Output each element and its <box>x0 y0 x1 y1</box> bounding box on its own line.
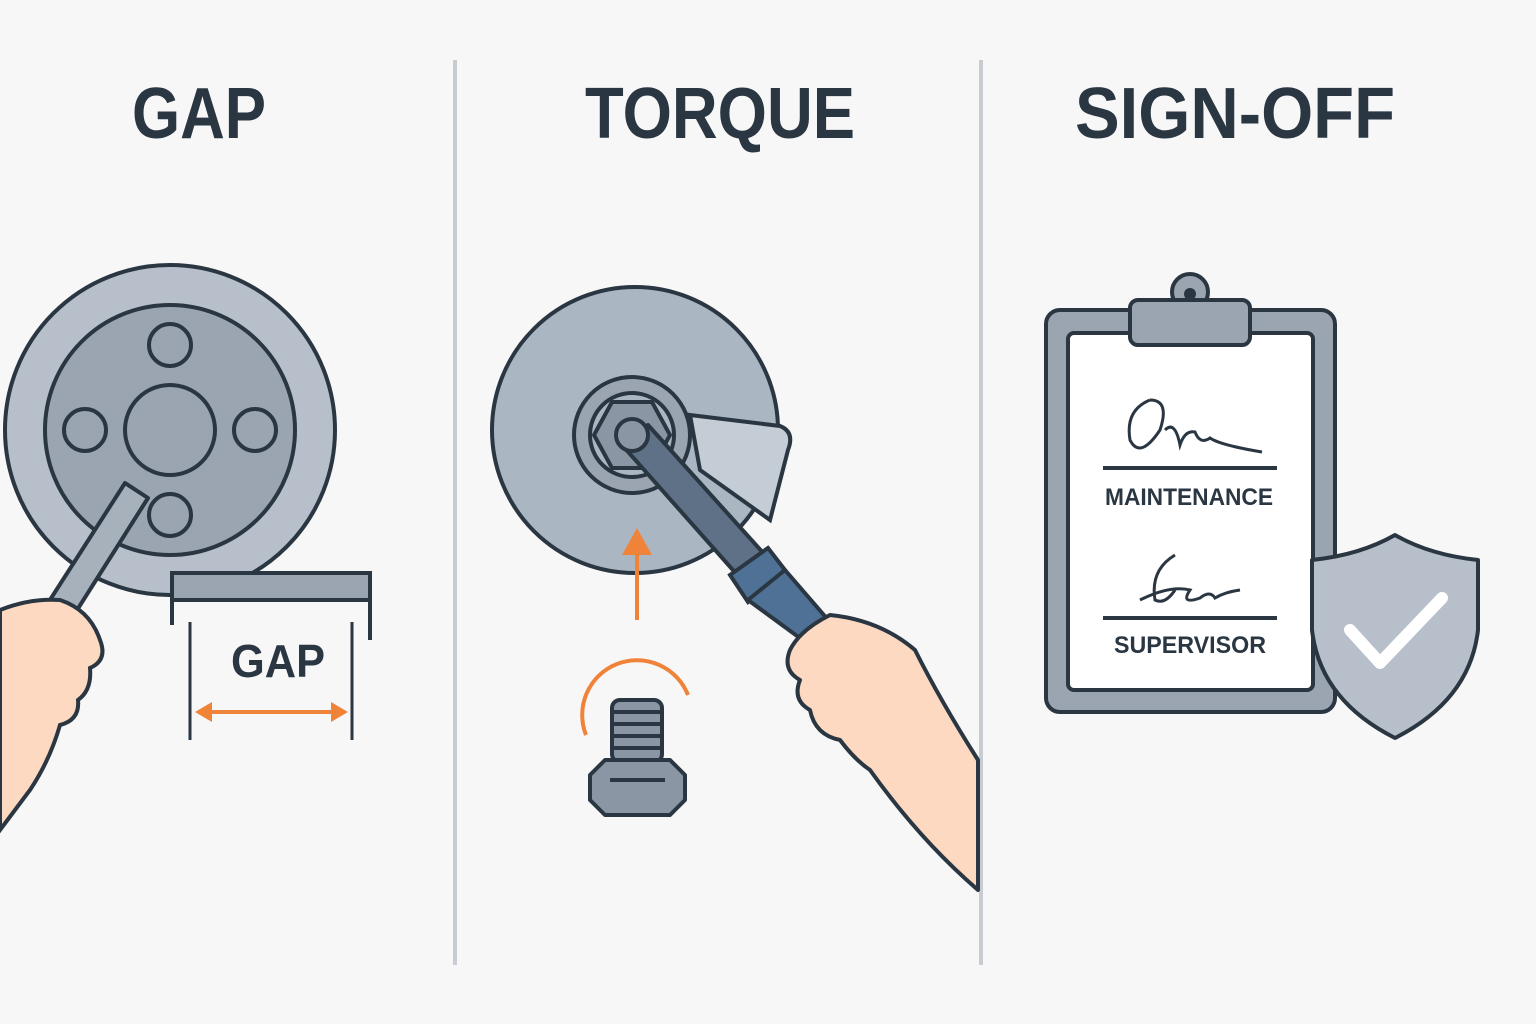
title: SIGN-OFF: SIGN-OFF <box>1075 74 1395 154</box>
icon: feeler probe and hand <box>0 483 148 830</box>
panel: sign-off <box>1046 274 1478 738</box>
icon: wheel <box>5 265 335 595</box>
label: GAP: GAP <box>231 635 325 687</box>
label: SUPERVISOR: SUPERVISOR <box>1114 632 1266 659</box>
icon: disc <box>492 287 790 573</box>
icon: wrench <box>594 402 880 688</box>
arrow: torque direction <box>582 528 688 735</box>
label: MAINTENANCE: MAINTENANCE <box>1105 484 1273 511</box>
panel: gap <box>0 265 370 830</box>
signature: supervisor <box>1103 555 1277 618</box>
arrow: gap measurement <box>195 702 348 722</box>
icon: hand <box>788 615 978 890</box>
signature: maintenance <box>1103 400 1277 468</box>
icon: gap gauge <box>172 573 370 740</box>
title: TORQUE: TORQUE <box>585 74 855 154</box>
icon: clipboard <box>1046 274 1335 712</box>
icon: bolt <box>590 700 685 815</box>
icon: shield with check <box>1312 535 1478 738</box>
title: GAP: GAP <box>132 74 266 154</box>
panel: torque <box>492 287 978 890</box>
